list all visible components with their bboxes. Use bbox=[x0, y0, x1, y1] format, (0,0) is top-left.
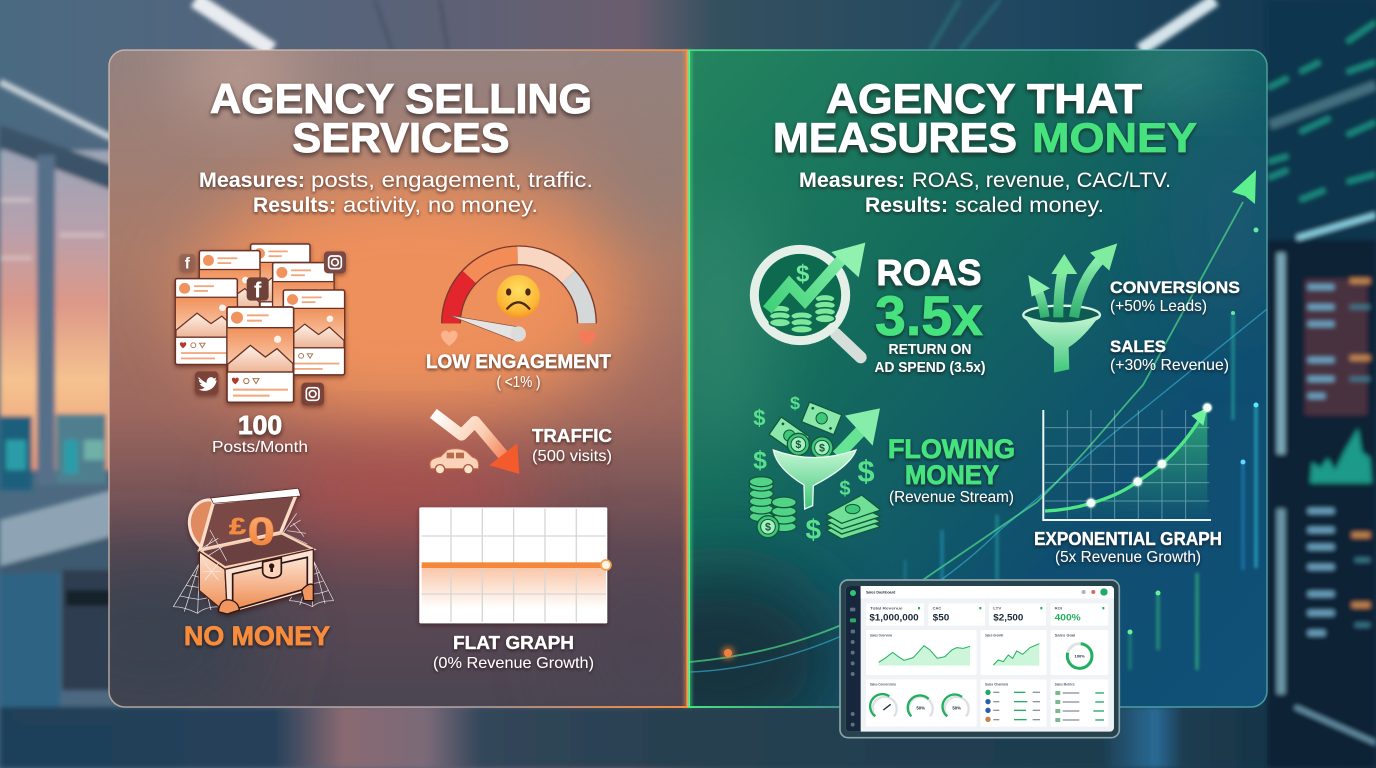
right subtitle bbox=[799, 169, 1171, 217]
right subtitle: Results: bbox=[865, 194, 948, 217]
exponential graph label: (5x Revenue Growth) bbox=[1055, 549, 1201, 566]
KPI cards: $2,500 bbox=[993, 612, 1023, 622]
KPI cards: LTV bbox=[993, 606, 1002, 610]
engagement label: LOW ENGAGEMENT bbox=[426, 352, 611, 373]
icon: facebook badges: f bbox=[254, 277, 262, 302]
posts label: 100 bbox=[238, 410, 282, 440]
KPI cards: CAC bbox=[933, 606, 942, 610]
icon: money funnel: $ bbox=[857, 455, 875, 489]
sales label: SALES bbox=[1110, 337, 1166, 356]
ROAS value bbox=[874, 252, 986, 376]
KPI cards: 400% bbox=[1055, 612, 1081, 622]
icon: ROAS magnifier: $ bbox=[796, 261, 809, 288]
left heading: AGENCY SELLING bbox=[210, 75, 592, 122]
exponential graph label bbox=[1034, 529, 1222, 566]
engagement label: ( <1% ) bbox=[496, 374, 540, 391]
icon: empty treasure chest with webs bbox=[173, 488, 334, 614]
revenue charts row: Sales Goal bbox=[1055, 633, 1075, 637]
icon: twitter badge bbox=[195, 371, 218, 395]
icon: conversion funnel bbox=[1023, 243, 1117, 373]
left subtitle: posts, engagement, traffic. bbox=[311, 169, 593, 192]
left subtitle bbox=[199, 169, 593, 217]
icon: sad face bbox=[497, 275, 540, 318]
icon: ROAS magnifier bbox=[754, 243, 865, 357]
flowing money label: MONEY bbox=[905, 460, 999, 490]
ROAS value: AD SPEND (3.5x) bbox=[874, 360, 986, 376]
bottom dashboard row: Sales Channels bbox=[985, 683, 1008, 687]
revenue charts row: 100% bbox=[1075, 653, 1085, 658]
dashboard tablet bbox=[840, 580, 1119, 738]
right subtitle: Measures: bbox=[799, 169, 905, 192]
icon: stack of social posts bbox=[175, 244, 346, 405]
flowing money label bbox=[888, 434, 1015, 506]
zero pound sign bbox=[229, 510, 275, 554]
flat graph label: (0% Revenue Growth) bbox=[433, 655, 594, 672]
zero pound sign: £ bbox=[229, 513, 247, 539]
icon: coin stacks bbox=[749, 477, 796, 532]
KPI cards: ROI bbox=[1055, 606, 1062, 610]
left heading: SERVICES bbox=[292, 114, 510, 161]
icon: falling traffic arrow and car bbox=[430, 413, 519, 474]
icon: facebook badges: f bbox=[185, 256, 191, 273]
start glow dot of growth line bbox=[724, 649, 732, 657]
decorative growth lines behind right panel bbox=[690, 170, 1267, 672]
KPI cards: $1,000,000 bbox=[869, 612, 919, 622]
dashboard header: Sales Dashboard bbox=[866, 590, 895, 594]
right heading: AGENCY THAT bbox=[826, 75, 1142, 122]
left heading bbox=[210, 75, 592, 161]
sales label bbox=[1110, 337, 1229, 374]
right heading: MEASURES bbox=[773, 114, 1017, 161]
right heading: MONEY bbox=[1032, 114, 1197, 161]
traffic label: (500 visits) bbox=[532, 448, 612, 465]
posts label: Posts/Month bbox=[212, 439, 308, 456]
engagement label bbox=[426, 352, 611, 391]
bottom dashboard row: 50% bbox=[916, 706, 925, 711]
left subtitle: Measures: bbox=[199, 169, 305, 192]
panel: agency selling services bbox=[109, 50, 686, 707]
icon: instagram badges bbox=[301, 251, 346, 405]
icon: cash stack bbox=[826, 495, 881, 539]
revenue charts row: Sales Overview bbox=[870, 633, 892, 637]
left subtitle: Results: bbox=[253, 194, 336, 217]
ROAS value: ROAS bbox=[876, 252, 982, 293]
conversions label: CONVERSIONS bbox=[1110, 278, 1240, 297]
flat graph label bbox=[433, 632, 594, 672]
flowing money label: FLOWING bbox=[888, 434, 1015, 464]
icon: money funnel: $ bbox=[806, 514, 822, 545]
icon: facebook badges bbox=[179, 254, 269, 302]
KPI cards bbox=[866, 603, 1108, 626]
ROAS value: 3.5x bbox=[875, 284, 983, 347]
bottom dashboard row: Sales Conversions bbox=[870, 683, 896, 687]
dashboard sidebar bbox=[846, 586, 861, 732]
icon: money funnel: $ bbox=[753, 406, 765, 431]
no money label: NO MONEY bbox=[184, 621, 330, 651]
dashboard header bbox=[861, 586, 1114, 598]
bottom dashboard row: Sales Metrics bbox=[1055, 683, 1075, 687]
conversions label bbox=[1110, 278, 1240, 315]
revenue charts row bbox=[866, 630, 1108, 675]
right subtitle: scaled money. bbox=[955, 194, 1104, 217]
sales label: (+30% Revenue) bbox=[1110, 357, 1229, 374]
bottom dashboard row: 50% bbox=[952, 706, 961, 711]
zero pound sign: 0 bbox=[248, 510, 275, 554]
traffic label: TRAFFIC bbox=[532, 425, 612, 446]
icon: engagement gauge bbox=[441, 255, 596, 346]
right heading bbox=[773, 75, 1197, 161]
revenue charts row: Sales Growth bbox=[985, 633, 1003, 637]
KPI cards: Total Revenue bbox=[870, 606, 903, 610]
conversions label: (+50% Leads) bbox=[1110, 298, 1207, 315]
flat graph label: FLAT GRAPH bbox=[453, 632, 574, 653]
center divider bbox=[684, 50, 692, 707]
panel: agency that measures money bbox=[690, 50, 1267, 707]
panel borders bbox=[109, 50, 1267, 708]
chart: exponential graph bbox=[1043, 404, 1211, 520]
traffic label bbox=[532, 425, 612, 465]
KPI cards: $50 bbox=[933, 612, 949, 622]
icon: money funnel: $ bbox=[790, 393, 800, 413]
exponential graph label: EXPONENTIAL GRAPH bbox=[1034, 529, 1222, 549]
bottom dashboard row bbox=[866, 679, 1108, 727]
icon: money funnel: $ bbox=[839, 478, 851, 500]
posts label bbox=[212, 410, 308, 456]
ROAS value: RETURN ON bbox=[888, 342, 972, 358]
icon: money funnel: $ bbox=[753, 447, 767, 474]
left subtitle: activity, no money. bbox=[343, 194, 538, 217]
flowing money label: (Revenue Stream) bbox=[889, 489, 1014, 506]
icon: money funnel bbox=[749, 393, 881, 545]
right subtitle: ROAS, revenue, CAC/LTV. bbox=[912, 169, 1171, 192]
chart: flat graph bbox=[419, 507, 611, 623]
